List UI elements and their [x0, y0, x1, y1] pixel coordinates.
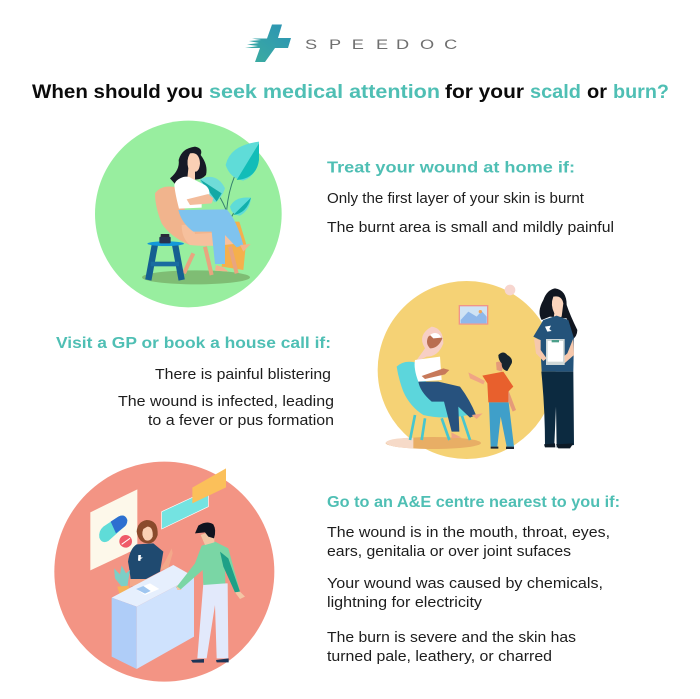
text: The burnt area is small and mildly painful: [327, 219, 614, 236]
floor shadows: [386, 437, 481, 449]
floating cards: [162, 468, 226, 529]
text: to a fever or pus formation: [148, 412, 334, 429]
text: [327, 575, 603, 611]
armchair: [184, 247, 237, 275]
hair: [170, 147, 207, 184]
reception desk: [112, 565, 194, 669]
nurse: [533, 288, 577, 448]
section: treat at home: [327, 160, 614, 236]
yellow circle: [378, 281, 556, 459]
illustration: woman resting at home: [95, 121, 282, 307]
title: When should you: [32, 81, 203, 103]
illustration: A&E reception: [54, 462, 274, 682]
heading: Treat your wound at home if:: [327, 160, 575, 176]
icon: speed cross: [245, 24, 291, 62]
text: lightning for electricity: [327, 594, 483, 611]
child: [468, 352, 516, 449]
title: burn?: [613, 81, 669, 103]
text: The wound is in the mouth, throat, eyes,: [327, 524, 610, 541]
receptionist: [128, 520, 173, 587]
text: Only the first layer of your skin is burnt: [327, 190, 585, 207]
plant pot: [114, 566, 130, 596]
heading: Go to an A&E centre nearest to you if:: [327, 494, 620, 511]
illustration: house call: [378, 281, 577, 459]
ground shadow: [142, 270, 250, 284]
text: [327, 629, 576, 665]
green circle: [95, 121, 282, 307]
patient: [415, 327, 483, 438]
shirt: [174, 177, 209, 209]
logo: Speedoc: [245, 24, 458, 62]
face: [187, 153, 200, 180]
patient chair: [397, 362, 470, 440]
section: GP or house call: [56, 335, 334, 429]
legs: [178, 209, 243, 264]
text: ears, genitalia or over joint sufaces: [327, 543, 571, 560]
pink dot: [505, 285, 515, 295]
stool: [147, 234, 184, 280]
text: The burn is severe and the skin has: [327, 629, 576, 646]
poster with pills: [90, 489, 137, 570]
section: A&E: [327, 494, 620, 665]
picture: [459, 306, 488, 324]
title: scald: [530, 81, 581, 103]
orange cushion: [222, 222, 246, 270]
title: for your: [445, 81, 524, 103]
patient: [176, 522, 245, 663]
title: seek medical attention: [209, 81, 440, 103]
text: The wound is infected, leading: [118, 393, 334, 410]
text: [327, 524, 610, 560]
wordmark: SPEEDOC: [305, 37, 458, 52]
text: turned pale, leathery, or charred: [327, 648, 552, 665]
title: or: [587, 81, 607, 103]
text: [118, 393, 334, 429]
text: Your wound was caused by chemicals,: [327, 575, 603, 592]
arm: [187, 194, 213, 205]
heading: Visit a GP or book a house call if:: [56, 335, 331, 352]
title: [32, 81, 669, 103]
plant: [200, 142, 259, 217]
salmon circle: [54, 462, 274, 682]
text: There is painful blistering: [155, 366, 331, 383]
